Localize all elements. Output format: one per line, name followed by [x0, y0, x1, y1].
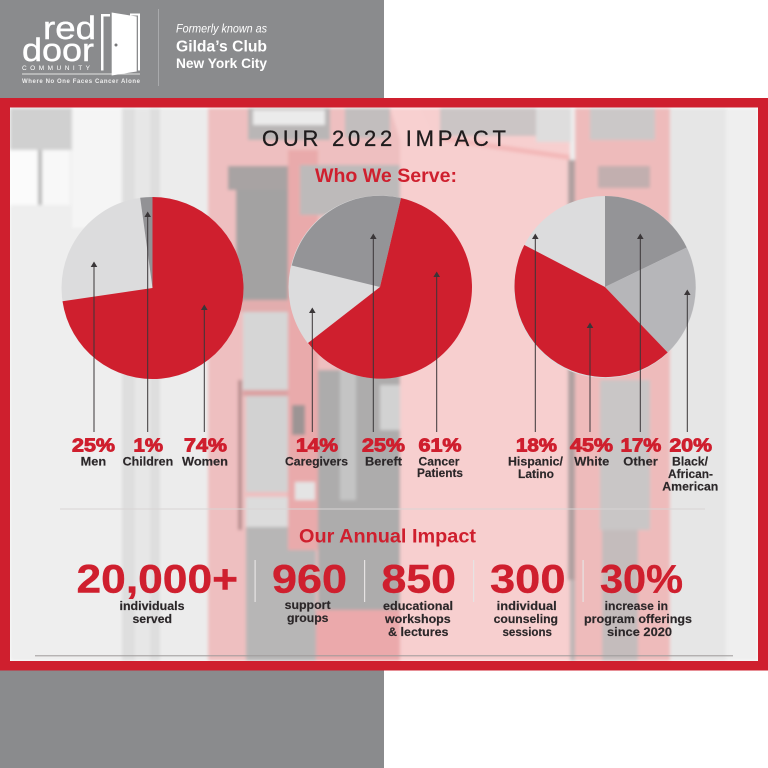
stat: individuals served: 20,000+ [76, 557, 238, 601]
stat: educational workshops and lectures: workshops [384, 614, 451, 626]
stat: support groups [272, 557, 347, 625]
logo divider [158, 9, 159, 86]
percent labels: gender: 1% [134, 436, 163, 456]
stat dividers [254, 560, 584, 602]
percent labels: race and ethnicity: 45% [570, 436, 613, 456]
stat: support groups: 960 [272, 557, 347, 601]
divider top [60, 508, 705, 510]
logo: red door community [22, 10, 141, 85]
percent labels: relationship: 25% [362, 436, 405, 456]
percent labels: gender: 25% [72, 436, 115, 456]
category labels: relationship: Caregivers [285, 457, 348, 469]
percent labels: race and ethnicity: 20% [670, 436, 712, 456]
bottom grey band [0, 670, 384, 768]
stat: individuals served [76, 557, 238, 626]
stat: educational workshops and lectures: & lectures [388, 627, 448, 639]
category labels: race and ethnicity: Hispanic/ [508, 457, 564, 469]
stat: increase in program offerings: increase in [605, 601, 668, 613]
stat: increase in program offerings [584, 557, 692, 639]
stat: increase in program offerings: since 2020 [607, 627, 672, 639]
category labels: race and ethnicity: African- [668, 469, 713, 481]
logo: red door community: COMMUNITY [22, 65, 91, 72]
stat: support groups: support [285, 600, 331, 612]
category labels: race and ethnicity: Other [623, 457, 658, 469]
category labels: relationship [285, 457, 463, 480]
percent labels: gender [72, 436, 227, 456]
pie chart: gender [62, 197, 244, 379]
heading: our annual impact: Our Annual Impact [299, 527, 477, 548]
logo: red door community: Where No One Faces Cancer Alone [22, 79, 141, 85]
red frame [0, 98, 768, 670]
category labels: gender: Children [123, 457, 173, 469]
percent labels: race and ethnicity [516, 436, 712, 456]
formerly known as text [176, 24, 267, 71]
stat: individual counseling sessions: sessions [502, 627, 552, 639]
pie chart: relationship to cancer [288, 196, 472, 379]
category labels: race and ethnicity: Black/ [672, 457, 709, 469]
formerly known as text: Gilda’s Club [176, 38, 267, 56]
logo: red door community: door [22, 32, 94, 68]
category labels: gender: Men [81, 457, 106, 469]
stat: increase in program offerings: program offerings [584, 614, 692, 626]
percent labels: gender: 74% [184, 436, 227, 456]
divider bottom [35, 655, 733, 656]
formerly known as text: New York City [176, 55, 267, 71]
category labels: race and ethnicity: Latino [518, 469, 554, 481]
percent labels: relationship: 61% [418, 436, 462, 456]
stat: individual counseling sessions: 300 [490, 557, 566, 601]
stat: educational workshops and lectures [382, 557, 456, 639]
category labels: gender [81, 457, 228, 469]
category labels: gender: Women [182, 457, 228, 469]
heading: who we serve: Who We Serve: [315, 166, 457, 187]
background photo of red door [10, 108, 758, 661]
percent labels: relationship [296, 436, 462, 456]
percent labels: relationship: 14% [296, 436, 338, 456]
stat: individual counseling sessions: counseling [494, 614, 558, 626]
stat: educational workshops and lectures: educational [383, 601, 453, 613]
stat: individuals served: served [132, 614, 172, 626]
category labels: relationship: Patients [417, 468, 463, 480]
formerly known as text: Formerly known as [176, 24, 267, 36]
stat: individual counseling sessions: individual [497, 601, 557, 613]
callout arrows [91, 212, 691, 432]
category labels: relationship: Cancer [418, 457, 460, 469]
percent labels: race and ethnicity: 18% [516, 436, 557, 456]
logo: red door community: red [43, 10, 96, 46]
stat: support groups: groups [287, 613, 328, 625]
category labels: race and ethnicity: American [662, 482, 718, 494]
percent labels: race and ethnicity: 17% [621, 436, 661, 456]
title: OUR 2022 IMPACT [262, 126, 506, 151]
stat: individuals served: individuals [120, 601, 184, 613]
category labels: relationship: Bereft [365, 457, 402, 469]
icon: open door [101, 12, 140, 76]
stat: increase in program offerings: 30% [600, 557, 683, 601]
pie chart: race and ethnicity [514, 196, 696, 378]
stat: individual counseling sessions [490, 557, 566, 639]
stat: educational workshops and lectures: 850 [382, 557, 456, 601]
category labels: race and ethnicity [508, 457, 718, 494]
category labels: race and ethnicity: White [574, 457, 609, 469]
top grey header band [0, 0, 384, 98]
